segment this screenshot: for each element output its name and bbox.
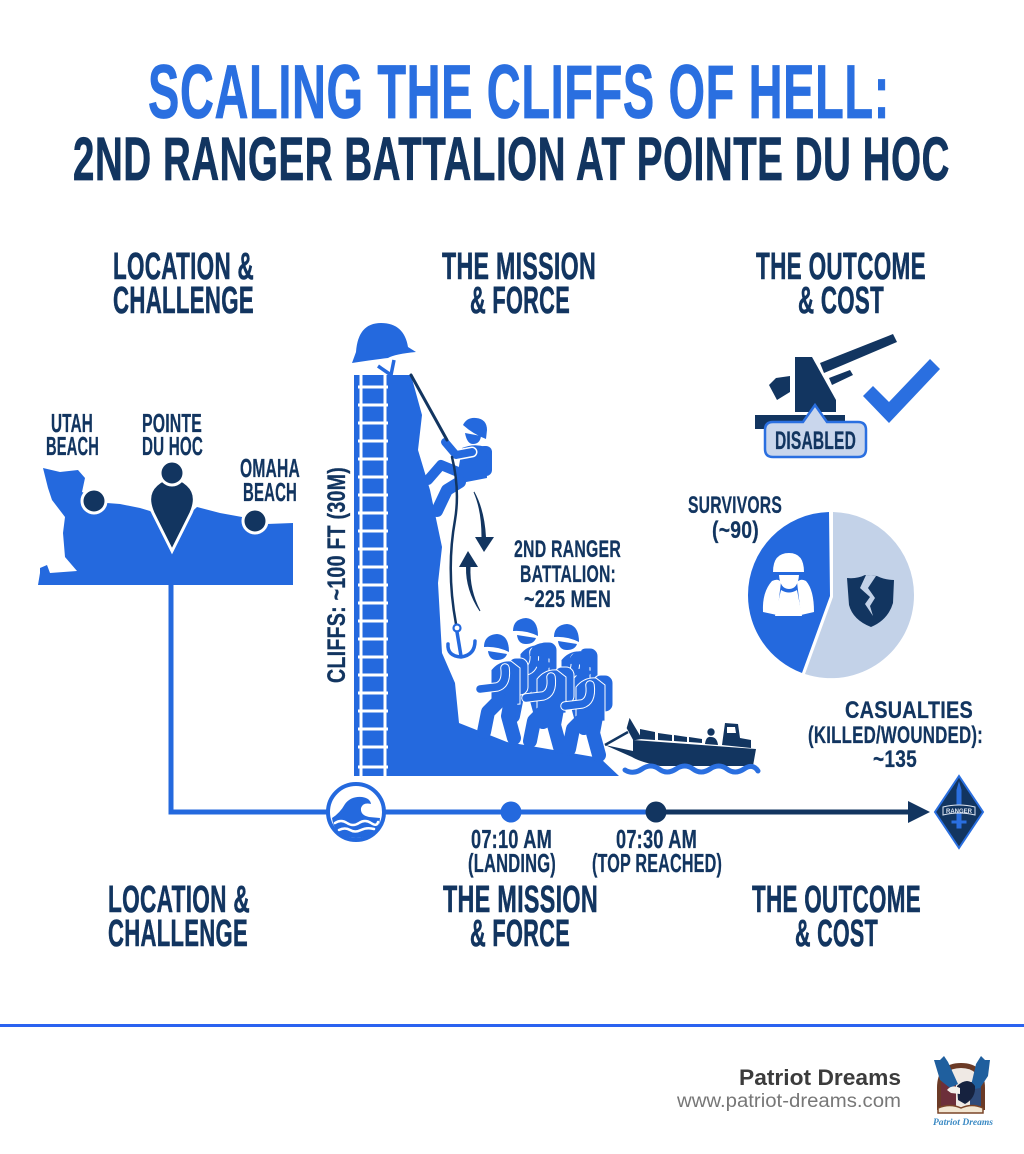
cliff silhouette <box>354 375 619 776</box>
label: 07:10 landing: 07:10 AM <box>471 824 552 854</box>
heading: location and challenge (bottom): LOCATION & <box>108 879 250 921</box>
icon: survivor soldier <box>763 553 814 616</box>
title <box>73 50 950 193</box>
label: survivors: (~90) <box>712 517 759 544</box>
pie slice: survivors <box>748 512 830 673</box>
icon: check mark <box>863 359 940 423</box>
heading: the outcome and cost (bottom): & COST <box>795 913 878 955</box>
logo: Patriot Dreams eagle <box>933 1056 994 1127</box>
label: 2nd Ranger Battalion strength: 2ND RANGER <box>514 536 621 563</box>
hull <box>605 740 756 766</box>
footer divider <box>0 1024 1024 1027</box>
label: Pointe du Hoc: POINTE <box>142 408 202 438</box>
heading: the outcome and cost (top) <box>756 246 926 322</box>
marker: Pointe du Hoc pin <box>150 461 194 551</box>
group of soldiers <box>480 618 613 755</box>
label: 2nd Ranger Battalion strength: ~225 MEN <box>524 586 611 613</box>
heading: location and challenge (bottom) <box>108 879 250 955</box>
label: 2nd Ranger Battalion strength: BATTALION: <box>520 561 616 588</box>
label: Omaha Beach: OMAHA <box>240 453 300 483</box>
ladder <box>358 375 388 776</box>
timeline final segment with arrow <box>656 801 930 823</box>
badge: disabled <box>765 405 866 457</box>
label: casualties: CASUALTIES <box>845 697 973 724</box>
heading: the mission and force (bottom) <box>443 879 598 955</box>
wheelhouse window <box>727 727 736 733</box>
icon: ranger badge <box>935 776 983 848</box>
label: 2nd Ranger Battalion strength <box>514 536 621 613</box>
label: Utah Beach <box>46 408 99 461</box>
label: Omaha Beach <box>240 453 300 507</box>
label: survivors: SURVIVORS <box>688 492 782 519</box>
arrow: ascending <box>459 551 480 611</box>
heading: location and challenge (top): LOCATION & <box>113 246 254 288</box>
label: Utah Beach: BEACH <box>46 431 99 461</box>
crew figure <box>705 728 718 745</box>
wheelhouse <box>722 723 751 748</box>
map of Normandy coast <box>38 408 300 585</box>
icon: disabled artillery gun <box>755 334 897 429</box>
heading: the outcome and cost (top): & COST <box>798 280 884 322</box>
label: Omaha Beach: BEACH <box>243 477 297 507</box>
cliff with ladder <box>354 375 619 776</box>
logo: Patriot Dreams eagle: Patriot Dreams <box>933 1117 994 1127</box>
label: 07:30 top reached: 07:30 AM <box>616 824 697 854</box>
heading: location and challenge (bottom): CHALLENGE <box>108 913 248 955</box>
label: survivors <box>688 492 782 544</box>
icon: helmet on cliff top <box>352 323 416 375</box>
ramp <box>605 721 640 745</box>
arrow: descending <box>474 492 494 552</box>
label: cliff height: CLIFFS: ~100 FT (30M) <box>323 467 351 683</box>
deck panels <box>640 729 702 743</box>
label: Pointe du Hoc <box>142 408 203 461</box>
footer brand text <box>676 1065 901 1112</box>
heading: the mission and force (top): THE MISSION <box>442 246 596 288</box>
gun barrel <box>820 334 897 373</box>
timeline point: top reached <box>646 802 666 822</box>
icon: landing craft <box>605 721 758 772</box>
footer brand text: www.patriot-dreams.com <box>676 1091 901 1112</box>
timeline point: landing <box>500 802 522 822</box>
pie slice: casualties <box>805 512 914 678</box>
label: Utah Beach: UTAH <box>51 408 93 438</box>
map landmass <box>38 468 293 585</box>
marker: Omaha Beach <box>243 509 267 533</box>
waves <box>625 766 758 772</box>
label: 07:30 top reached: (TOP REACHED) <box>592 848 722 878</box>
rope and grappling hook <box>411 375 475 657</box>
icon: broken shield <box>847 575 894 627</box>
label: casualties: ~135 <box>873 746 917 773</box>
breech <box>769 376 790 400</box>
label: casualties <box>808 697 983 773</box>
gun base <box>755 415 845 429</box>
icon: wave timeline start <box>328 784 384 840</box>
label: 07:30 top reached <box>592 824 722 878</box>
heading: the mission and force (bottom): THE MISSION <box>443 879 598 921</box>
footer brand text: Patriot Dreams <box>739 1065 901 1090</box>
marker: Utah Beach <box>82 489 106 513</box>
climbing soldier <box>428 418 492 511</box>
label: 07:10 landing: (LANDING) <box>468 848 556 878</box>
heading: location and challenge (top): CHALLENGE <box>113 280 254 322</box>
heading: the outcome and cost (bottom) <box>752 879 921 955</box>
gun body <box>795 357 836 412</box>
heading: the mission and force (top) <box>442 246 596 322</box>
heading: the mission and force (bottom): & FORCE <box>470 913 570 955</box>
pie chart: survivors vs casualties <box>748 512 914 678</box>
badge: disabled: DISABLED <box>775 427 856 455</box>
label: Pointe du Hoc: DU HOC <box>142 431 203 461</box>
heading: the mission and force (top): & FORCE <box>470 280 570 322</box>
heading: location and challenge (top) <box>113 246 254 322</box>
icon: ranger badge: RANGER <box>946 809 973 815</box>
recoil tube <box>829 370 853 385</box>
label: 07:10 landing <box>468 824 556 878</box>
timeline connector from map <box>171 585 660 812</box>
